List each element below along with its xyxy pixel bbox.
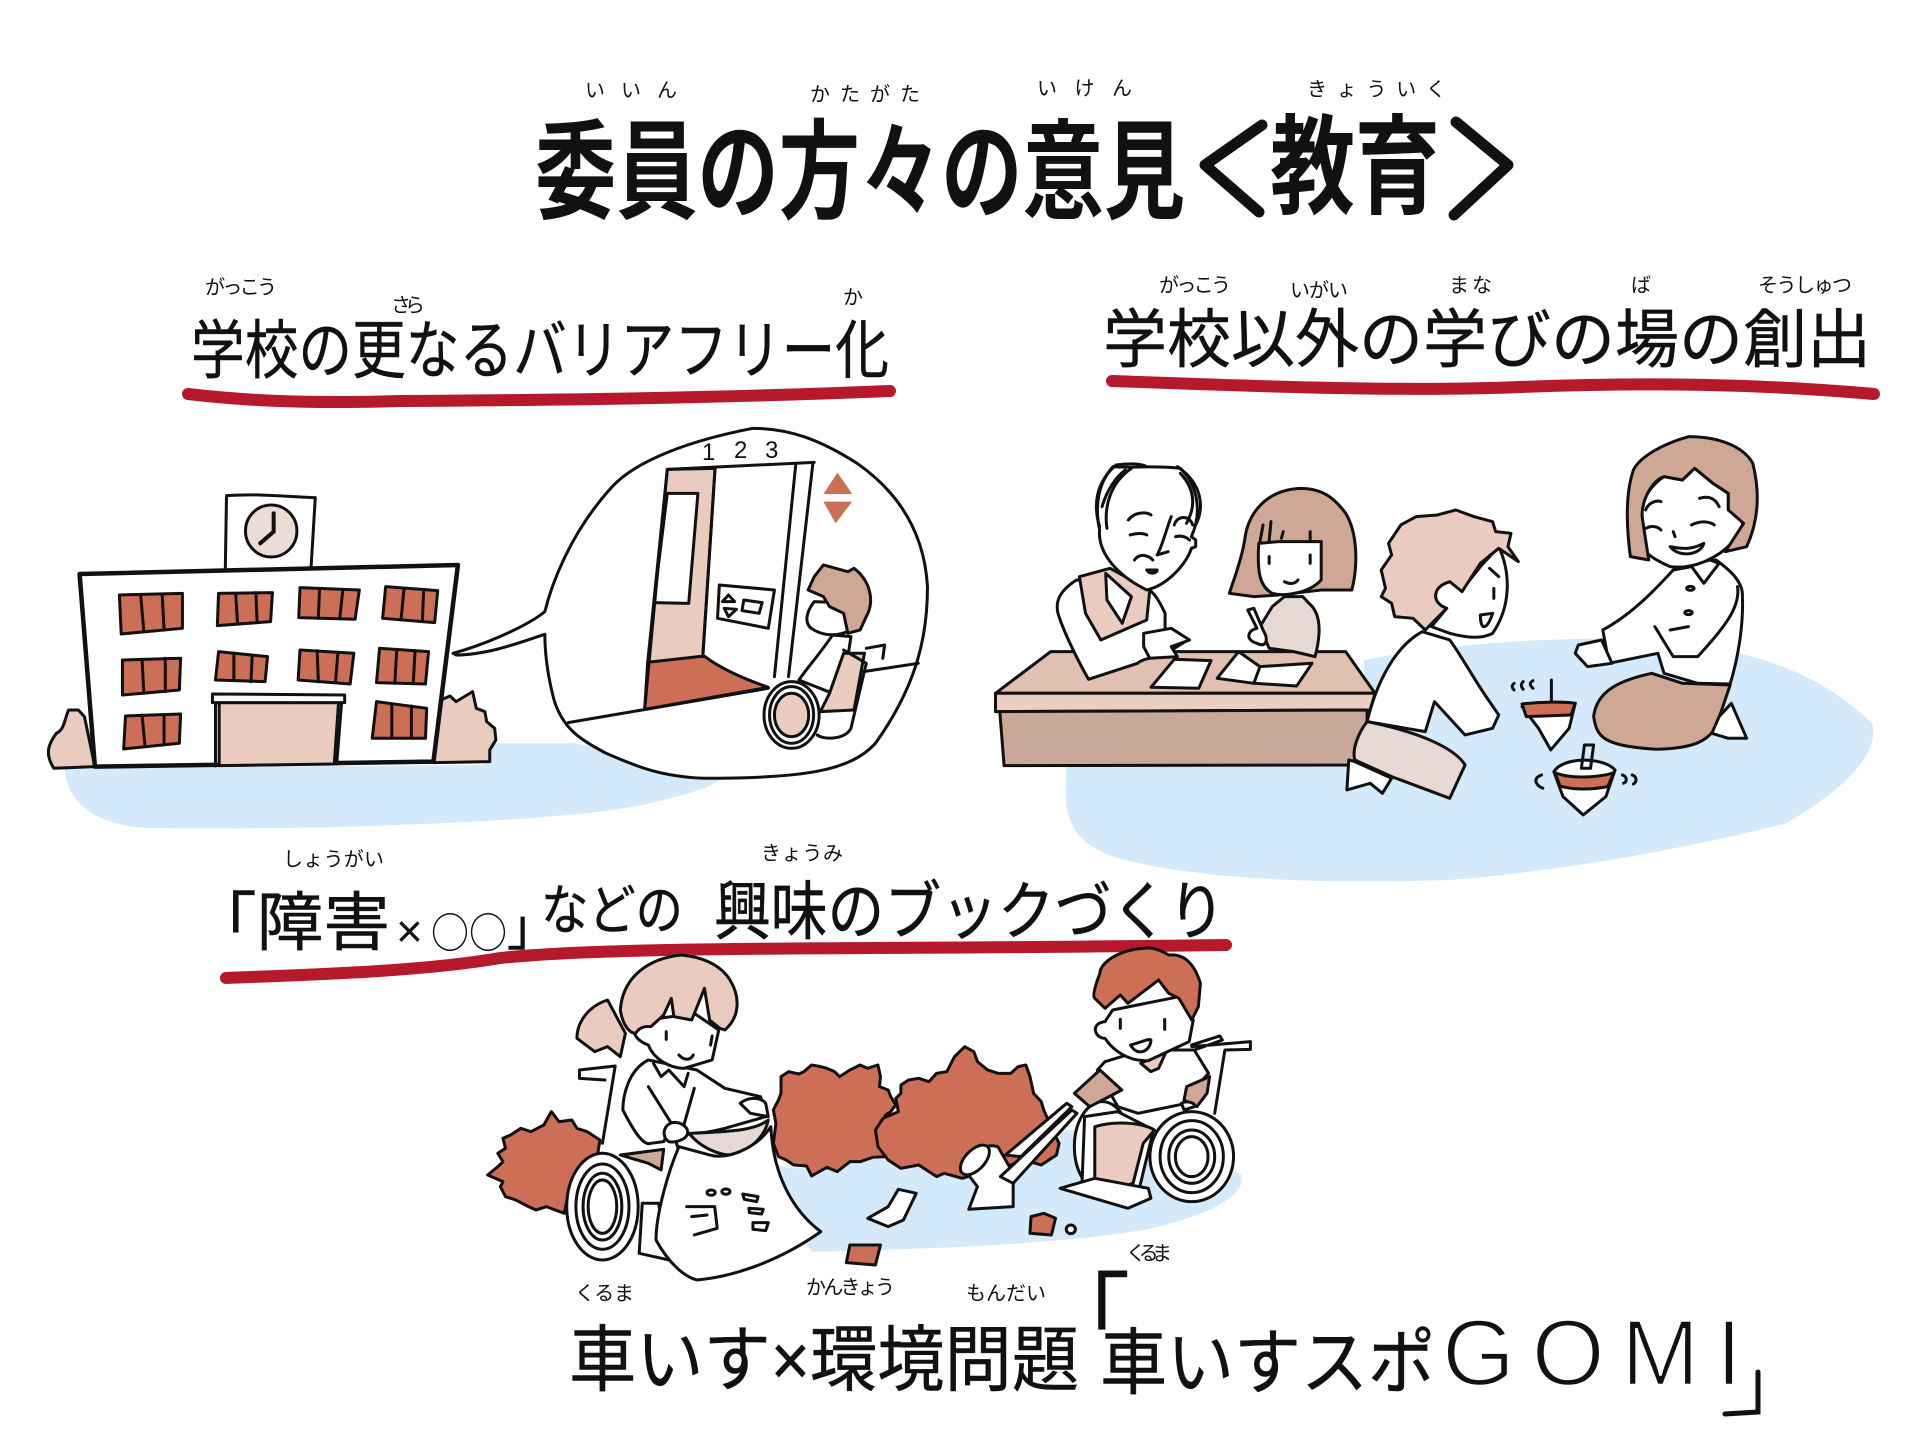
title: 委員の方々の意見 [535,112,1185,233]
heading: 学校の更なるバリアフリー化 [188,276,890,402]
bottom caption: 車いす×環境問題「車いすスポGOMI」 [569,1243,1758,1414]
title: かたがた [810,83,920,106]
heading: 学校の更なるバリアフリー化: さら [391,295,425,317]
heading: 学校の更なるバリアフリー化: がっこう [205,276,277,299]
heading: 「障害×○○」などの興味のブックづくり: ○○ [431,900,507,961]
spinning tops [1512,680,1636,815]
ground [64,743,722,829]
heading: 「障害×○○」などの興味のブックづくり: きょうみ [761,843,843,865]
elevator floor numbers: 2 [734,437,747,464]
elevator floor numbers [702,437,778,466]
girl in wheelchair [567,955,768,1260]
heading: 学校以外の学びの場の創出: いがい [1290,279,1348,302]
panel: learning outside school illustration [996,437,1873,881]
bottom caption: 車いす×環境問題「車いすスポGOMI」: かんきょう [806,1277,895,1299]
elevator arrows [823,473,852,523]
boy [1347,510,1518,798]
heading: 学校以外の学びの場の創出: がっこう [1159,274,1231,297]
grabber tongs and can [954,1103,1077,1209]
elevator floor numbers: 3 [765,437,778,464]
girl [1229,488,1356,657]
wheelchair user [764,565,885,748]
elevator [568,462,918,723]
heading: 「障害×○○」などの興味のブックづくり: 「障害 [190,887,390,959]
title: いけん [1037,78,1132,100]
title: きょういく [1307,79,1446,101]
title: いいん [585,80,677,102]
heading: 学校以外の学びの場の創出: まな [1449,275,1492,297]
trash bag [656,1127,821,1280]
school building [80,565,458,767]
heading: 学校の更なるバリアフリー化: か [843,287,863,309]
heading: 「障害×○○」などの興味のブックづくり: 」 [507,900,557,956]
bushes [488,1047,1059,1213]
litter [846,1189,1075,1265]
heading: 「障害×○○」などの興味のブックづくり: などの [541,881,683,941]
heading: 「障害×○○」などの興味のブックづくり [190,843,1226,978]
bottom caption: 車いす×環境問題「車いすスポGOMI」: もんだい [966,1283,1046,1305]
title: 教育 [1270,107,1440,228]
heading: 学校以外の学びの場の創出: そうしゅつ [1758,275,1852,297]
low table [996,652,1375,766]
grandmother [1575,437,1757,749]
heading: 「障害×○○」などの興味のブックづくり: しょうがい [283,848,384,871]
bottom caption: 車いす×環境問題「車いすスポGOMI」: 車いす×環境問題 [569,1321,1079,1401]
bottom caption: 車いす×環境問題「車いすスポGOMI」: 車いすスポ [1100,1324,1435,1404]
boy in wheelchair [1060,948,1250,1208]
heading: 学校以外の学びの場の創出 [1103,274,1874,394]
panel: trash pickup illustration [488,948,1250,1280]
heading: 学校以外の学びの場の創出: ば [1631,274,1651,297]
heading: 学校以外の学びの場の創出: 学校以外の学びの場の創出 [1103,304,1871,376]
heading: 「障害×○○」などの興味のブックづくり: × [396,905,423,957]
heading: 「障害×○○」などの興味のブックづくり: 興味のブックづくり [714,876,1225,948]
elevator floor numbers: 1 [702,439,715,466]
bottom caption: 車いす×環境問題「車いすスポGOMI」: 「 [1040,1267,1130,1367]
title [535,78,1508,233]
panel: school barrier-free illustration [48,428,927,829]
ground [766,1130,1242,1252]
man [1057,464,1200,679]
bottom caption: 車いす×環境問題「車いすスポGOMI」: GOMI [1442,1300,1742,1405]
heading: 学校の更なるバリアフリー化: 学校の更なるバリアフリー化 [191,315,889,387]
bottom caption: 車いす×環境問題「車いすスポGOMI」: くるま [1126,1243,1172,1265]
clock tower [225,495,315,570]
bushes [48,692,496,768]
floor [1065,638,1873,881]
bottom caption: 車いす×環境問題「車いすスポGOMI」: くるま [575,1283,634,1305]
speech bubble [453,428,927,778]
